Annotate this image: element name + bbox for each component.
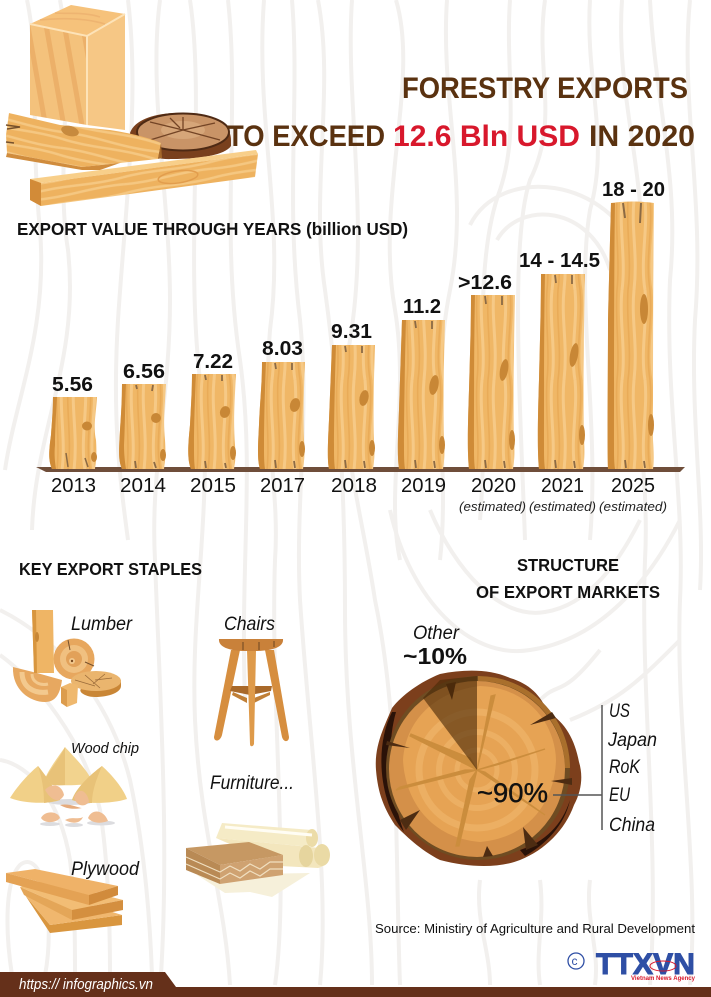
bar 2015: [188, 350, 236, 497]
year 2014: 2014: [120, 475, 166, 497]
title line 2: 12.6 Bln USD: [393, 120, 580, 153]
value 2021: 14 - 14.5: [519, 249, 600, 272]
label: plywood: Plywood: [71, 859, 140, 880]
value 2014: 6.56: [123, 360, 165, 383]
value 2013: 5.56: [52, 373, 93, 396]
rough plank: [6, 113, 162, 170]
label: chairs: Chairs: [224, 614, 275, 635]
agency globe: [650, 961, 676, 971]
icon: copyright: c: [572, 954, 578, 968]
year 2013: 2013: [51, 475, 96, 497]
icon: paper and cardboard: [186, 823, 330, 897]
panel: wood chip: [10, 740, 139, 827]
logo: copyright and agency: [568, 948, 695, 982]
label: furniture: Furniture...: [210, 773, 294, 794]
bar 2020: [458, 271, 526, 514]
heading line 1: STRUCTURE: [517, 555, 619, 575]
year 2019: 2019: [401, 475, 446, 497]
label: other: Other: [413, 623, 460, 644]
bar 2021: [519, 249, 600, 514]
note 2020: (estimated): [459, 500, 526, 514]
title: [227, 72, 695, 153]
illustration: wooden planks and log: [6, 5, 258, 206]
icon: lumber: [13, 610, 121, 707]
block: [30, 5, 125, 130]
year 2018: 2018: [331, 475, 377, 497]
bar 2019: [398, 295, 446, 497]
bar 2025: [599, 178, 667, 514]
icon: plywood: [6, 869, 123, 933]
value 2019: 11.2: [403, 295, 441, 318]
log slice: [130, 113, 231, 159]
source: Source: Ministiry of Agriculture and Rural Development: [375, 921, 695, 936]
market list: [607, 701, 657, 836]
year 2025: 2025: [611, 475, 655, 497]
heading line 2: OF EXPORT MARKETS: [476, 582, 660, 602]
bar 2013: [49, 373, 97, 497]
heading: structure of export markets: [476, 555, 660, 602]
title line 2: IN 2020: [589, 120, 695, 153]
heading: key export staples: KEY EXPORT STAPLES: [19, 559, 202, 579]
title line 1: FORESTRY EXPORTS: [402, 72, 688, 105]
log rings: [386, 681, 572, 857]
value 2015: 7.22: [193, 350, 233, 373]
panel: plywood: [6, 859, 140, 933]
label: lumber: Lumber: [71, 614, 133, 635]
bar chart: export value: [36, 178, 685, 514]
long plank: [30, 150, 258, 206]
market: China: China: [609, 815, 655, 836]
value: 90%: ~90%: [477, 778, 548, 808]
footer band: [0, 972, 711, 997]
year 2015: 2015: [190, 475, 236, 497]
wedge: other 10%: [423, 676, 477, 770]
market: EU: EU: [609, 785, 630, 806]
title line 2: TO EXCEED: [227, 120, 385, 153]
dark crescents: [381, 712, 570, 856]
log bark: [376, 671, 581, 866]
panel: chairs: [214, 614, 289, 746]
panel: lumber: [13, 610, 133, 707]
footer url: https:// infographics.vn: [19, 977, 153, 993]
icon: wood chip: [10, 747, 127, 827]
value 2025: 18 - 20: [602, 178, 665, 201]
panel: furniture: [186, 773, 330, 897]
year 2021: 2021: [541, 475, 584, 497]
chart: export markets log: [376, 623, 657, 866]
value 2017: 8.03: [262, 337, 303, 360]
bar 2018: [328, 320, 377, 497]
note 2021: (estimated): [529, 500, 596, 514]
year 2017: 2017: [260, 475, 305, 497]
icon: stool: [214, 639, 289, 746]
ground shadow: [36, 467, 685, 472]
year 2020: 2020: [471, 475, 516, 497]
value: 10%: ~10%: [403, 643, 467, 669]
value 2018: 9.31: [331, 320, 372, 343]
market: Japan: Japan: [607, 730, 657, 751]
market: US: US: [609, 701, 630, 722]
value 2020: >12.6: [458, 271, 512, 294]
agency wordmark: TTXVN: [596, 948, 695, 981]
heading: export value: EXPORT VALUE THROUGH YEARS (billion USD): [17, 219, 408, 239]
market: RoK: RoK: [609, 757, 641, 778]
value: other: [403, 623, 467, 669]
bar 2014: [119, 360, 166, 497]
agency tagline: Vietnam News Agency: [631, 975, 695, 982]
bracket connector: [553, 705, 602, 830]
bar 2017: [258, 337, 305, 497]
label: wood chip: Wood chip: [71, 740, 139, 757]
note 2025: (estimated): [599, 500, 667, 514]
